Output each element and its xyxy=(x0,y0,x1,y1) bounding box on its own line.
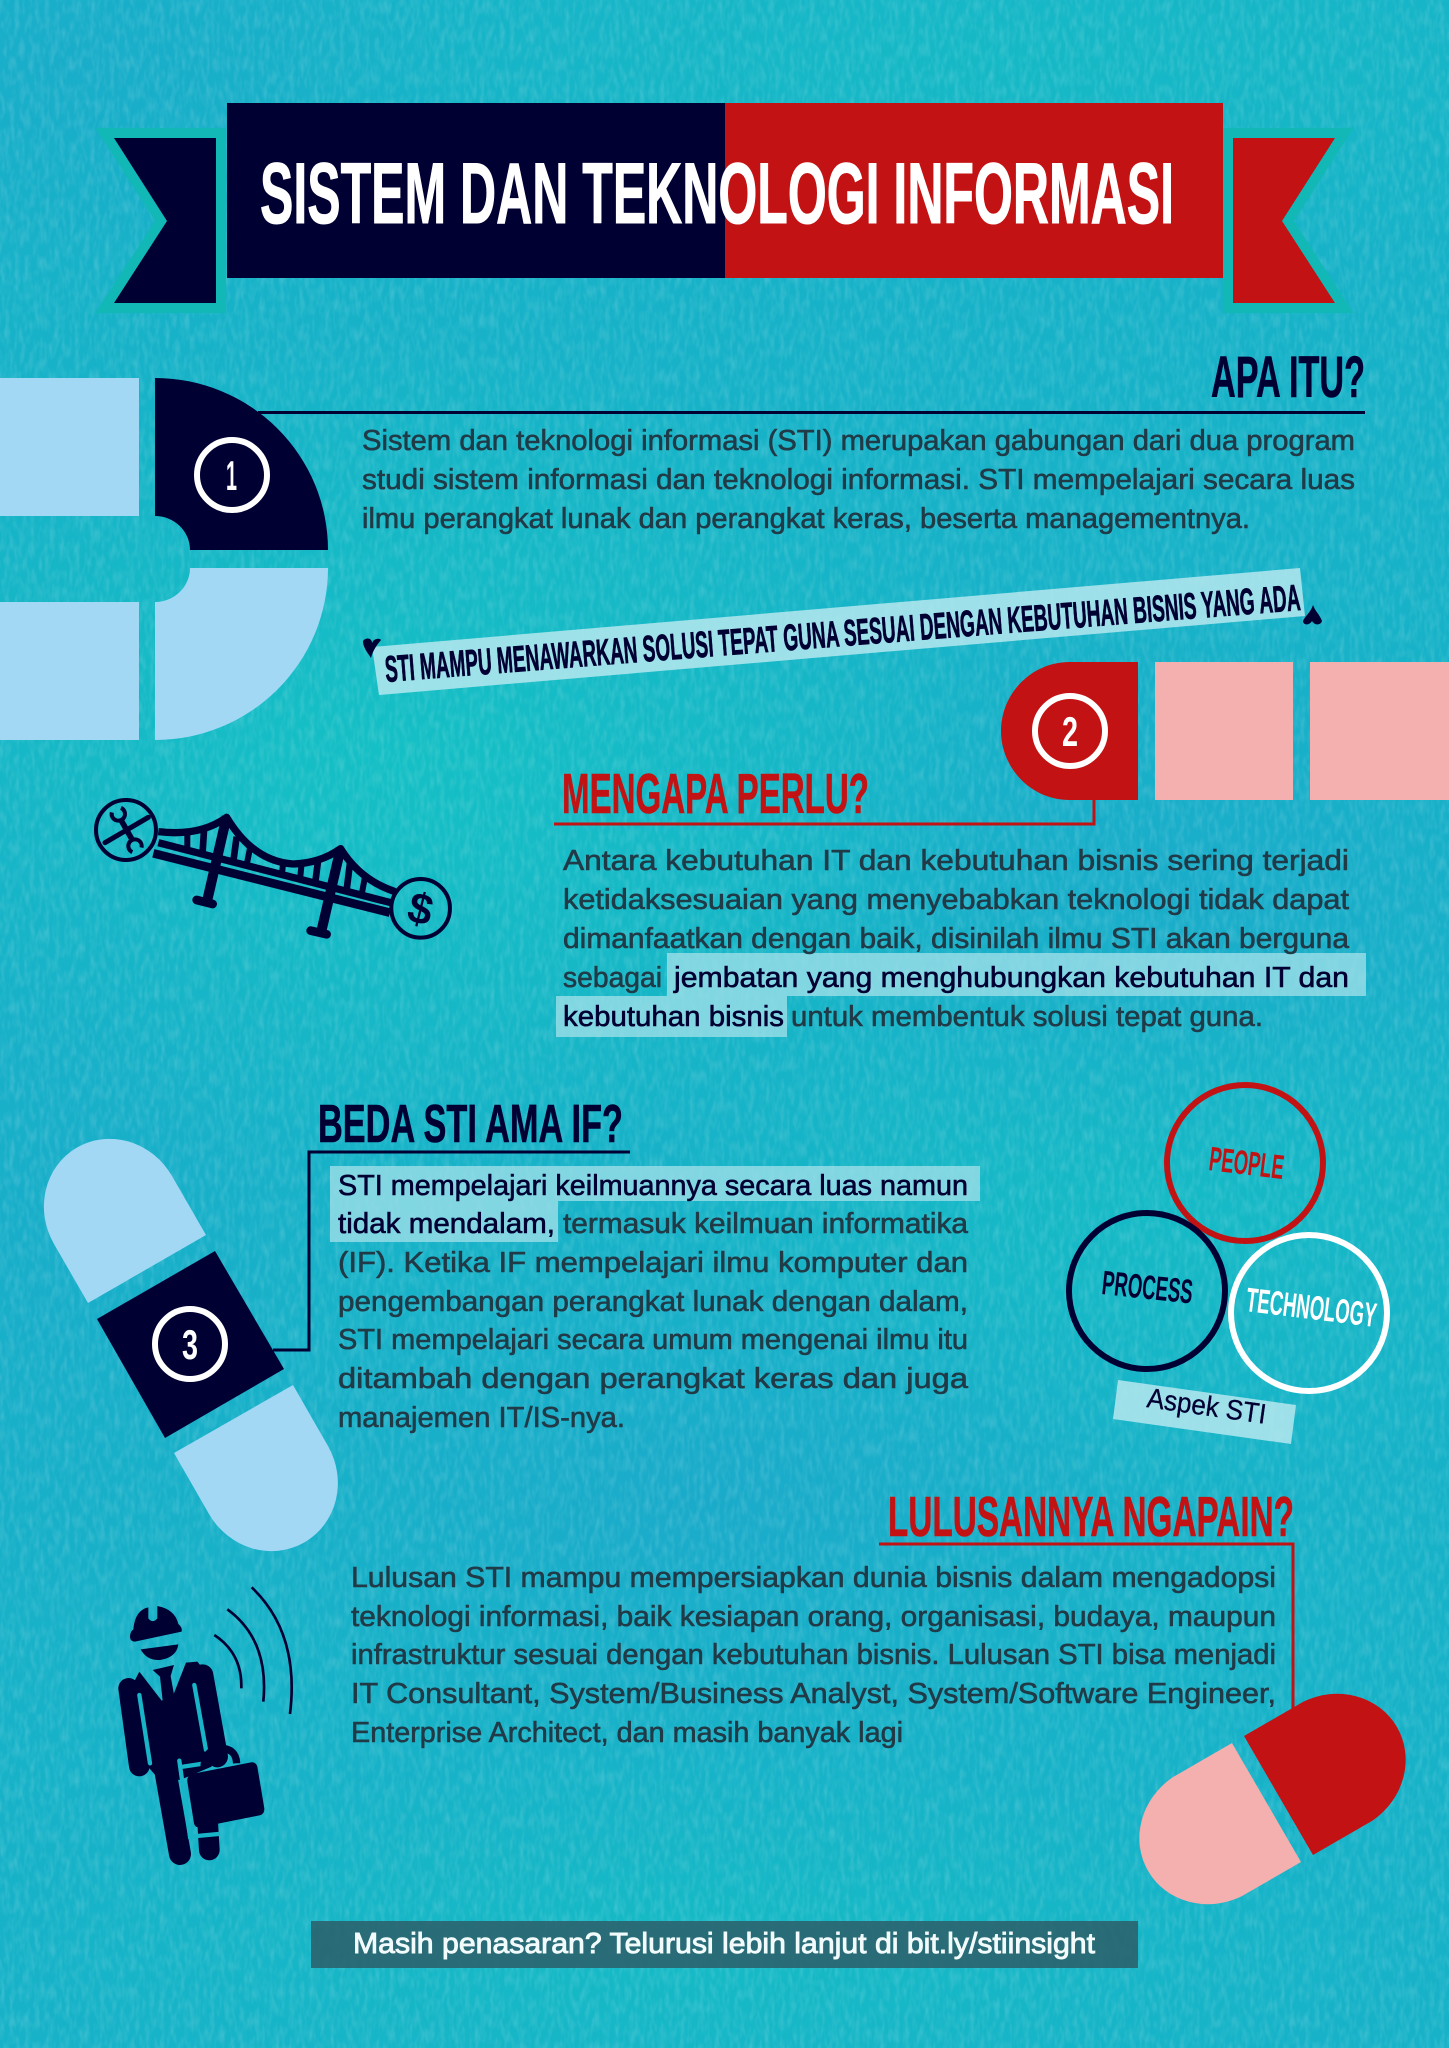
capsule red xyxy=(1244,1694,1406,1855)
circle technology xyxy=(1231,1235,1387,1391)
text: mengapa perlu: ketidaksesuaian yang menyebabkan teknologi tidak dapat xyxy=(563,884,1349,916)
circle process: PROCESS xyxy=(1100,1264,1195,1311)
banner navy half xyxy=(227,103,725,278)
quarter light xyxy=(155,568,328,740)
red tab xyxy=(1001,662,1138,800)
highlight xyxy=(330,1166,980,1242)
circle people: PEOPLE xyxy=(1207,1140,1286,1187)
banner right tail xyxy=(1233,138,1335,303)
banner left tail xyxy=(114,138,216,303)
rule: apa itu xyxy=(258,411,1365,414)
text: lulusannya: Enterprise Architect, dan masih banyak lagi xyxy=(351,1717,903,1749)
number 3: 3 xyxy=(182,1321,198,1368)
rule: lulusannya xyxy=(879,1544,1293,1712)
slits xyxy=(139,1685,218,1837)
text: mengapa perlu xyxy=(556,845,1366,1037)
text: beda sti: pengembangan perangkat lunak dengan dalam, xyxy=(338,1286,968,1318)
aspek sti label: Aspek STI xyxy=(1145,1382,1268,1430)
quote mark right xyxy=(1303,605,1322,624)
text: mengapa perlu: untuk membentuk solusi tepat guna. xyxy=(791,1001,1263,1033)
text: apa itu: ilmu perangkat lunak dan perangkat keras, beserta managementnya. xyxy=(362,503,1250,535)
text: apa itu: studi sistem informasi dan teknologi informasi. STI mempelajari secara luas xyxy=(362,464,1355,496)
circle process xyxy=(1069,1213,1225,1369)
helmet xyxy=(130,1606,182,1642)
rule: mengapa perlu xyxy=(554,800,1094,824)
capsule bottom right xyxy=(1139,1694,1406,1904)
number 1: 1 xyxy=(226,452,237,499)
quote mark left xyxy=(363,639,381,658)
text: lulusannya: Lulusan STI mampu mempersiapkan dunia bisnis dalam mengadopsi xyxy=(351,1562,1276,1594)
aspek sti label xyxy=(1113,1380,1296,1444)
icon: worker with briefcase xyxy=(129,1587,292,1854)
text: mengapa perlu: kebutuhan bisnis xyxy=(563,1001,784,1033)
pink block 2 xyxy=(1310,662,1449,800)
heading: mengapa perlu: MENGAPA PERLU? xyxy=(562,762,869,826)
dollar circle: $ xyxy=(403,883,438,936)
tool circle xyxy=(96,800,156,860)
text: lulusannya xyxy=(351,1562,1276,1749)
text: beda sti: termasuk keilmuan informatika xyxy=(563,1208,969,1240)
text: beda sti: ditambah dengan perangkat keras dan juga xyxy=(338,1363,969,1395)
rule: beda sti xyxy=(273,1152,630,1350)
text: beda sti: tidak mendalam, xyxy=(338,1208,555,1240)
number 2: 2 xyxy=(1062,708,1078,755)
capsule pink xyxy=(1139,1743,1301,1904)
block bottom left xyxy=(0,602,139,740)
text: mengapa perlu: Antara kebutuhan IT dan kebutuhan bisnis sering terjadi xyxy=(563,845,1349,877)
capsule top xyxy=(44,1139,206,1303)
face xyxy=(141,1644,178,1660)
pink block 1 xyxy=(1155,662,1293,800)
tie xyxy=(153,1665,175,1713)
text: beda sti xyxy=(330,1166,980,1434)
text: apa itu: Sistem dan teknologi informasi (STI) merupakan gabungan dari dua program xyxy=(362,425,1355,457)
footer bar xyxy=(311,1921,1138,1968)
towers xyxy=(207,817,227,900)
body xyxy=(129,1675,217,1854)
number 1 xyxy=(197,440,267,510)
text: lulusannya: teknologi informasi, baik kesiapan orang, organisasi, budaya, maupun xyxy=(351,1601,1276,1633)
section 3 graphic: capsule xyxy=(44,1139,338,1551)
text: beda sti: STI mempelajari secara umum mengenai ilmu itu xyxy=(338,1324,968,1356)
heading: beda sti ama if: BEDA STI AMA IF? xyxy=(318,1094,623,1154)
section 2 graphic xyxy=(1001,662,1449,800)
number 3 xyxy=(155,1309,225,1379)
text: beda sti: manajemen IT/IS-nya. xyxy=(338,1402,625,1434)
quarter navy xyxy=(155,378,328,550)
handle xyxy=(204,1748,237,1768)
icon: bridge xyxy=(96,800,450,938)
banner red half xyxy=(725,103,1223,278)
text: apa itu xyxy=(362,425,1355,535)
text: mengapa perlu: jembatan yang menghubungkan kebutuhan IT dan xyxy=(673,962,1349,994)
text: mengapa perlu: sebagai xyxy=(563,962,662,994)
number 2 xyxy=(1035,696,1105,766)
text: lulusannya: infrastruktur sesuai dengan kebutuhan bisnis. Lulusan STI bisa menjadi xyxy=(351,1639,1276,1671)
text: lulusannya: IT Consultant, System/Business Analyst, System/Software Engineer, xyxy=(351,1678,1276,1710)
footer bar: Masih penasaran? Telurusi lebih lanjut di bit.ly/stiinsight xyxy=(353,1928,1095,1960)
briefcase xyxy=(187,1762,264,1827)
signal waves xyxy=(214,1587,292,1714)
text: mengapa perlu: dimanfaatkan dengan baik, disinilah ilmu STI akan berguna xyxy=(563,923,1350,955)
dollar circle xyxy=(391,879,450,938)
section 1 graphic xyxy=(0,378,328,740)
text: beda sti: STI mempelajari keilmuannya secara luas namun xyxy=(338,1170,968,1202)
highlight xyxy=(556,953,1366,1037)
text: beda sti: (IF). Ketika IF mempelajari ilmu komputer dan xyxy=(338,1247,968,1279)
capsule middle xyxy=(97,1251,284,1438)
quote band xyxy=(363,568,1322,695)
block top left xyxy=(0,378,139,516)
circle people xyxy=(1167,1085,1323,1241)
capsule bottom xyxy=(174,1385,338,1551)
deck and cables xyxy=(153,817,395,934)
diagram: aspek sti xyxy=(1069,1085,1387,1444)
title banner xyxy=(114,103,1335,303)
